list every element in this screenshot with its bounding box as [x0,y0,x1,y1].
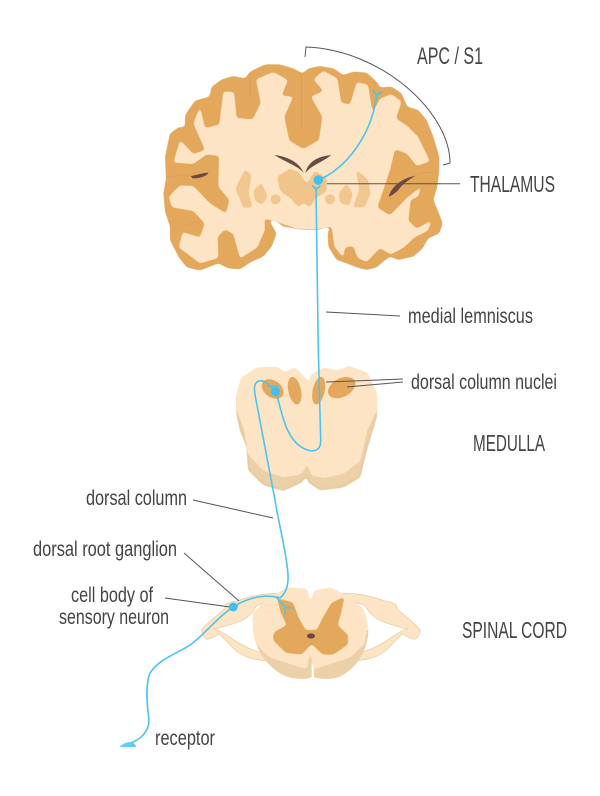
label: dorsal column: dorsal column [86,487,187,510]
label: cell body of sensory neuron [59,584,169,629]
bracket: APC / S1 [305,47,450,165]
neuron pathway [130,91,382,743]
sensory neuron cell body [229,602,238,612]
label: MEDULLA: MEDULLA [473,430,545,456]
cord back layer [253,630,368,679]
label: cell body of sensory neuron: cell body of [71,584,153,607]
thalamus [277,169,327,207]
medulla [237,366,377,491]
label: THALAMUS: THALAMUS [470,171,555,197]
first-order neuron [130,381,292,743]
leader: cell body [165,598,230,607]
leader: dorsal column nuclei [326,379,403,387]
leader: dorsal column [193,500,273,518]
brain white matter [169,71,432,263]
sulcus lines [166,75,439,227]
second-order neuron [276,186,321,451]
leader: thalamus [327,183,460,185]
label: dorsal column nuclei: dorsal column nuclei [411,371,557,394]
medulla back layer [237,393,377,491]
cord front layer [253,587,368,669]
leader: dorsal root ganglion [184,553,239,601]
thalamus neuron cell body [314,175,323,185]
medulla front layer [237,366,377,478]
leader lines [165,47,460,607]
brain coronal section [163,64,443,271]
label: cell body of sensory neuron: sensory neuron [59,606,169,629]
icon: receptor [120,742,136,747]
lateral ventricles [191,155,416,197]
deep nuclei [235,169,371,208]
spinal roots [201,593,420,661]
brain grey matter [163,64,443,271]
central canal [307,633,315,639]
spinal cord [201,587,420,679]
medulla neuron cell body [271,387,280,396]
third-order neuron [318,91,382,180]
grey matter [273,597,348,655]
label: dorsal root ganglion: dorsal root ganglion [33,538,177,561]
leader: medial lemniscus [326,312,400,316]
label: receptor: receptor [155,727,215,750]
label: APC / S1: APC / S1 [417,43,483,70]
dorsal column nuclei [258,373,359,406]
label: medial lemniscus: medial lemniscus [408,305,533,328]
